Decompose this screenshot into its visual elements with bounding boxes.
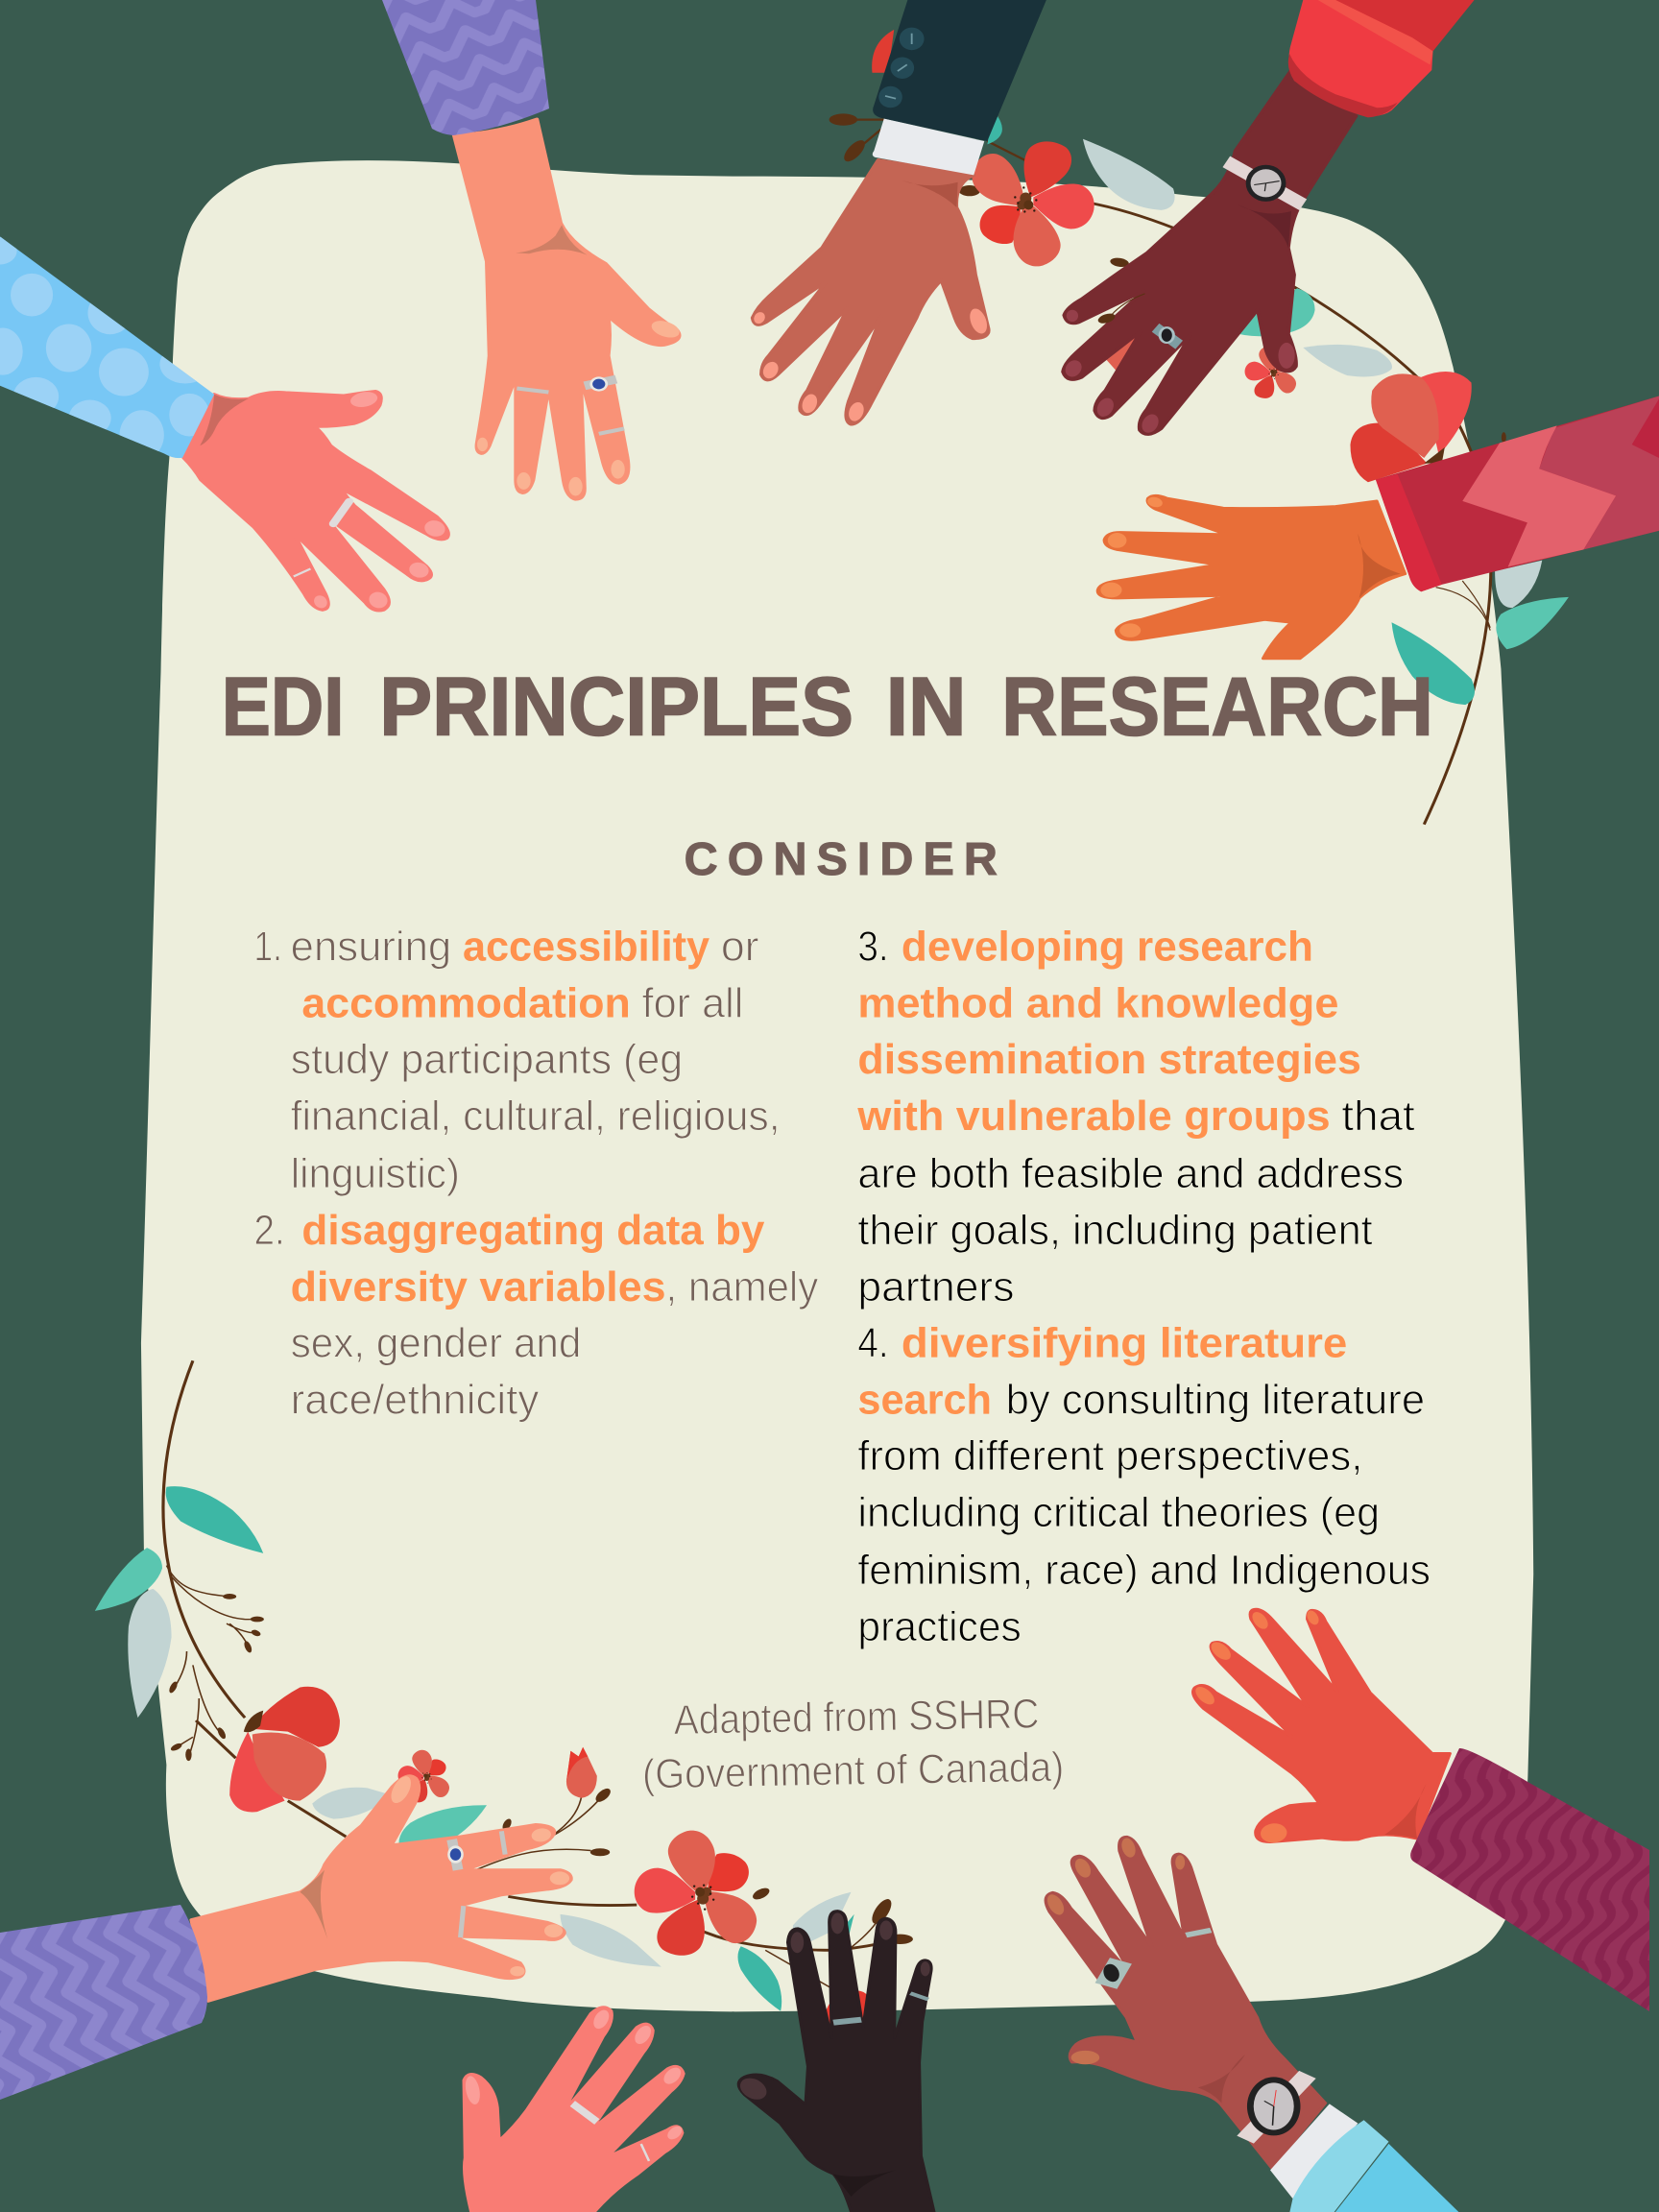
item 4: feminism, race) and Indigenous bbox=[857, 1548, 1431, 1594]
item 3: dissemination strategies bbox=[857, 1037, 1361, 1083]
title bbox=[222, 661, 1433, 754]
source credit: (Government of Canada) bbox=[642, 1744, 1065, 1798]
source credit bbox=[641, 1691, 1065, 1798]
shirt cuff bbox=[873, 118, 984, 175]
item 3: with vulnerable groups bbox=[856, 1094, 1331, 1140]
item 3: partners bbox=[857, 1264, 1014, 1310]
item 1: financial, cultural, religious, bbox=[291, 1094, 781, 1140]
hand: maroon with watch and red sleeve, top right bbox=[1062, 0, 1475, 435]
hand: blue polka sleeve, left bbox=[0, 231, 449, 611]
item 1 bbox=[253, 925, 781, 1197]
item 3: their goals, including patient bbox=[857, 1208, 1373, 1254]
item 1: for all bbox=[642, 980, 743, 1026]
item 3: developing research bbox=[902, 925, 1313, 971]
item 3: 3. bbox=[857, 925, 889, 971]
right column text bbox=[856, 925, 1431, 1650]
shirt cuff bbox=[1270, 2104, 1358, 2199]
hand: red with wavy maroon sleeve, bottom right bbox=[1191, 1609, 1649, 2011]
hand: purple zigzag sleeve, top bbox=[382, 0, 683, 499]
item 1: accommodation bbox=[301, 980, 631, 1026]
left column text bbox=[253, 925, 819, 1423]
title: PRINCIPLES bbox=[379, 661, 854, 754]
item 1: linguistic) bbox=[291, 1151, 460, 1197]
sleeve bbox=[1289, 2120, 1388, 2212]
watch bbox=[1245, 2075, 1308, 2140]
item 1: or bbox=[721, 925, 759, 971]
hand: orange with patterned red sleeve, right bbox=[1097, 396, 1659, 659]
item 4: by consulting literature bbox=[1006, 1377, 1425, 1423]
item 3: method and knowledge bbox=[857, 980, 1338, 1026]
title: RESEARCH bbox=[1001, 661, 1433, 754]
item 2: , namely bbox=[666, 1264, 819, 1310]
watch bbox=[1226, 161, 1303, 204]
sleeve bbox=[1376, 396, 1659, 591]
source credit: Adapted from SSHRC bbox=[673, 1692, 1040, 1743]
central cream panel bbox=[141, 160, 1533, 2011]
red sleeve bbox=[1324, 0, 1475, 51]
hand: near-black, bottom centre bbox=[734, 1911, 934, 2212]
subheading: consider: CONSIDER bbox=[685, 833, 998, 885]
hand: brown with watch and blue sleeve, bottom bbox=[1045, 1837, 1458, 2212]
sleeve bbox=[382, 0, 549, 135]
item 1: 1. bbox=[253, 925, 282, 971]
sleeve bbox=[1410, 1748, 1649, 2011]
item 4: search bbox=[857, 1377, 992, 1423]
item 2: disaggregating data by bbox=[301, 1208, 764, 1254]
item 1: accessibility bbox=[463, 925, 709, 971]
item 4: from different perspectives, bbox=[857, 1433, 1362, 1479]
floral wreath: top right bbox=[830, 30, 1569, 825]
sleeve bbox=[0, 231, 222, 463]
item 4: diversifying literature bbox=[902, 1321, 1347, 1367]
title: IN bbox=[886, 661, 967, 754]
item 2: race/ethnicity bbox=[291, 1377, 540, 1423]
item 1: ensuring bbox=[291, 925, 451, 971]
hand: navy suit sleeve, top centre bbox=[752, 0, 1046, 424]
item 1: study participants (eg bbox=[291, 1037, 683, 1083]
jacket sleeve bbox=[873, 0, 1046, 141]
item 3 bbox=[856, 925, 1415, 1310]
item 2: diversity variables bbox=[291, 1264, 666, 1310]
item 4: 4. bbox=[857, 1321, 889, 1367]
item 4: including critical theories (eg bbox=[857, 1490, 1380, 1536]
item 3: are both feasible and address bbox=[857, 1151, 1404, 1197]
hand: peach with purple sleeve, bottom left bbox=[0, 1773, 571, 2100]
item 2: sex, gender and bbox=[291, 1321, 581, 1367]
floral wreath: bottom left bbox=[95, 1360, 913, 2041]
title: EDI bbox=[222, 661, 345, 754]
item 2 bbox=[253, 1208, 819, 1423]
item 4 bbox=[857, 1321, 1431, 1650]
item 4: practices bbox=[857, 1604, 1022, 1650]
hand: pink, bottom bbox=[464, 2008, 685, 2212]
item 2: 2. bbox=[253, 1208, 285, 1254]
item 3: that bbox=[1341, 1094, 1415, 1140]
sleeve bbox=[0, 1905, 207, 2100]
